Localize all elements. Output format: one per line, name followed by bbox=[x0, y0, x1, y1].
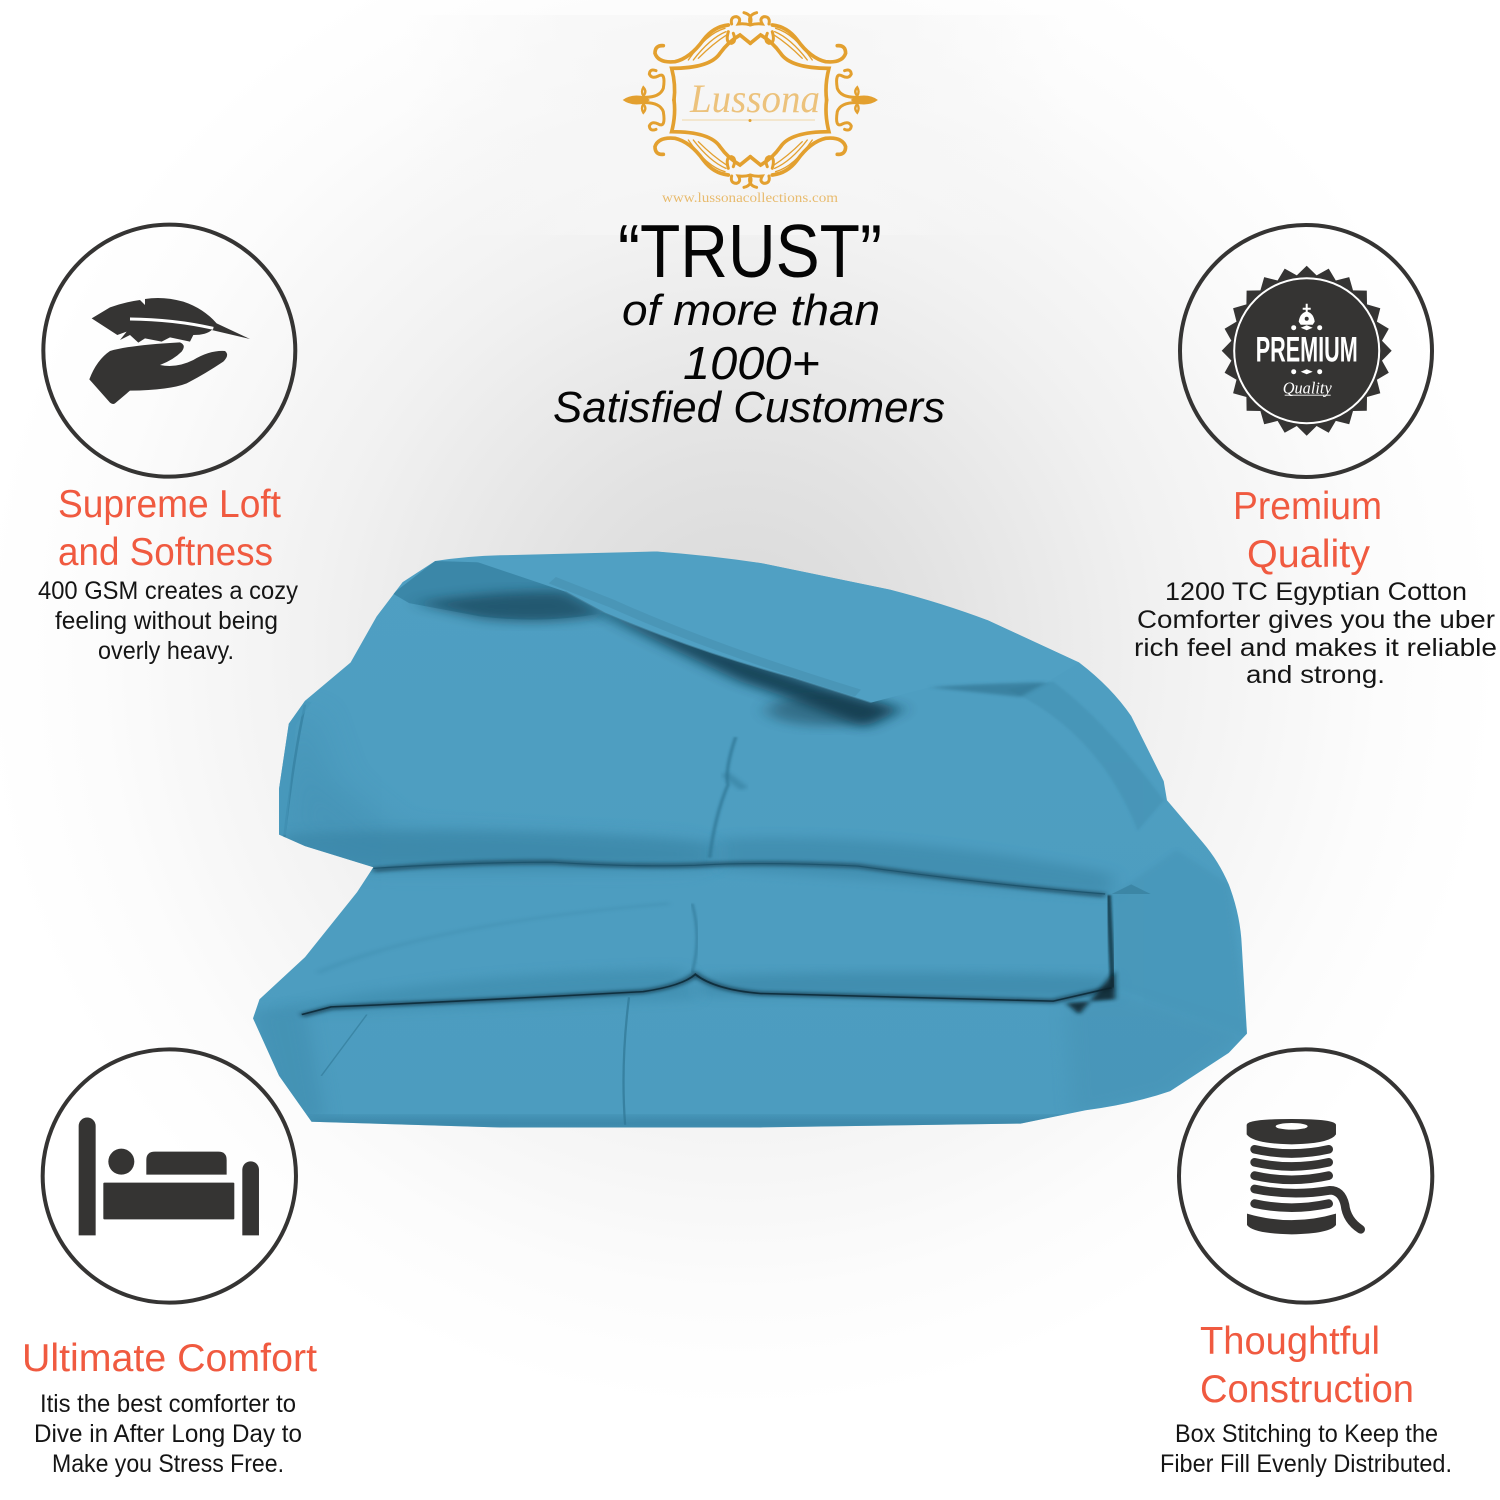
text: supreme loft bbox=[38, 577, 298, 665]
heading: supreme loft: and Softness bbox=[58, 531, 273, 574]
icon: premium badge: Quality bbox=[1283, 379, 1332, 398]
headline: trust bbox=[553, 209, 945, 432]
panel: ultimate comfort bbox=[22, 1049, 317, 1478]
icon: feather and hand bbox=[43, 225, 295, 477]
text: ultimate comfort: Itis the best comforter to bbox=[40, 1390, 296, 1418]
text: thoughtful construction: Box Stitching to Keep the bbox=[1175, 1420, 1438, 1448]
logo: Lussona bbox=[689, 76, 820, 121]
text: ultimate comfort bbox=[34, 1390, 302, 1478]
icon: premium badge: PREMIUM bbox=[1256, 331, 1358, 370]
heading: thoughtful construction: Construction bbox=[1200, 1368, 1414, 1411]
text: premium quality bbox=[1134, 578, 1497, 689]
panel: supreme loft bbox=[38, 225, 298, 665]
heading: premium quality: Quality bbox=[1247, 533, 1370, 576]
heading: premium quality bbox=[1233, 485, 1382, 576]
text: premium quality: and strong. bbox=[1246, 661, 1385, 689]
panel: premium quality bbox=[1134, 225, 1497, 689]
text: premium quality: 1200 TC Egyptian Cotton bbox=[1165, 578, 1467, 606]
text: supreme loft: 400 GSM creates a cozy bbox=[38, 577, 298, 605]
text: premium quality: Comforter gives you the uber bbox=[1137, 606, 1495, 634]
text: ultimate comfort: Make you Stress Free. bbox=[52, 1450, 284, 1478]
left edge band bbox=[284, 705, 305, 839]
text: thoughtful construction: Fiber Fill Evenly Distributed. bbox=[1160, 1450, 1452, 1478]
headline: trust: 1000+ bbox=[683, 337, 820, 389]
shadow: under flap bbox=[592, 613, 908, 732]
text: ultimate comfort: Dive in After Long Day to bbox=[34, 1420, 302, 1448]
heading: thoughtful construction: Thoughtful bbox=[1200, 1320, 1380, 1363]
headline: trust: Satisfied Customers bbox=[553, 383, 945, 432]
folds: dark creases bbox=[373, 862, 1105, 895]
logo bbox=[623, 13, 878, 205]
text: premium quality: rich feel and makes it reliable bbox=[1134, 634, 1497, 662]
icon: premium badge bbox=[1180, 225, 1432, 477]
text: supreme loft: overly heavy. bbox=[98, 637, 234, 665]
comforter bbox=[240, 540, 1260, 1140]
panel: thoughtful construction bbox=[1160, 1049, 1452, 1478]
headline: trust: of more than bbox=[622, 286, 880, 335]
text: thoughtful construction bbox=[1160, 1420, 1452, 1478]
heading: supreme loft: Supreme Loft bbox=[58, 483, 281, 526]
heading: supreme loft bbox=[58, 483, 281, 574]
icon: bed bbox=[43, 1049, 296, 1303]
seams bbox=[318, 737, 744, 1125]
icon: thread spool bbox=[1179, 1049, 1432, 1303]
flap bbox=[474, 551, 1079, 703]
heading: thoughtful construction bbox=[1200, 1320, 1414, 1411]
heading: ultimate comfort: Ultimate Comfort bbox=[22, 1337, 317, 1380]
logo: www.lussonacollections.com bbox=[662, 190, 839, 205]
text: supreme loft: feeling without being bbox=[55, 607, 278, 635]
headline: trust: “TRUST” bbox=[618, 209, 882, 293]
heading: premium quality: Premium bbox=[1233, 485, 1382, 528]
